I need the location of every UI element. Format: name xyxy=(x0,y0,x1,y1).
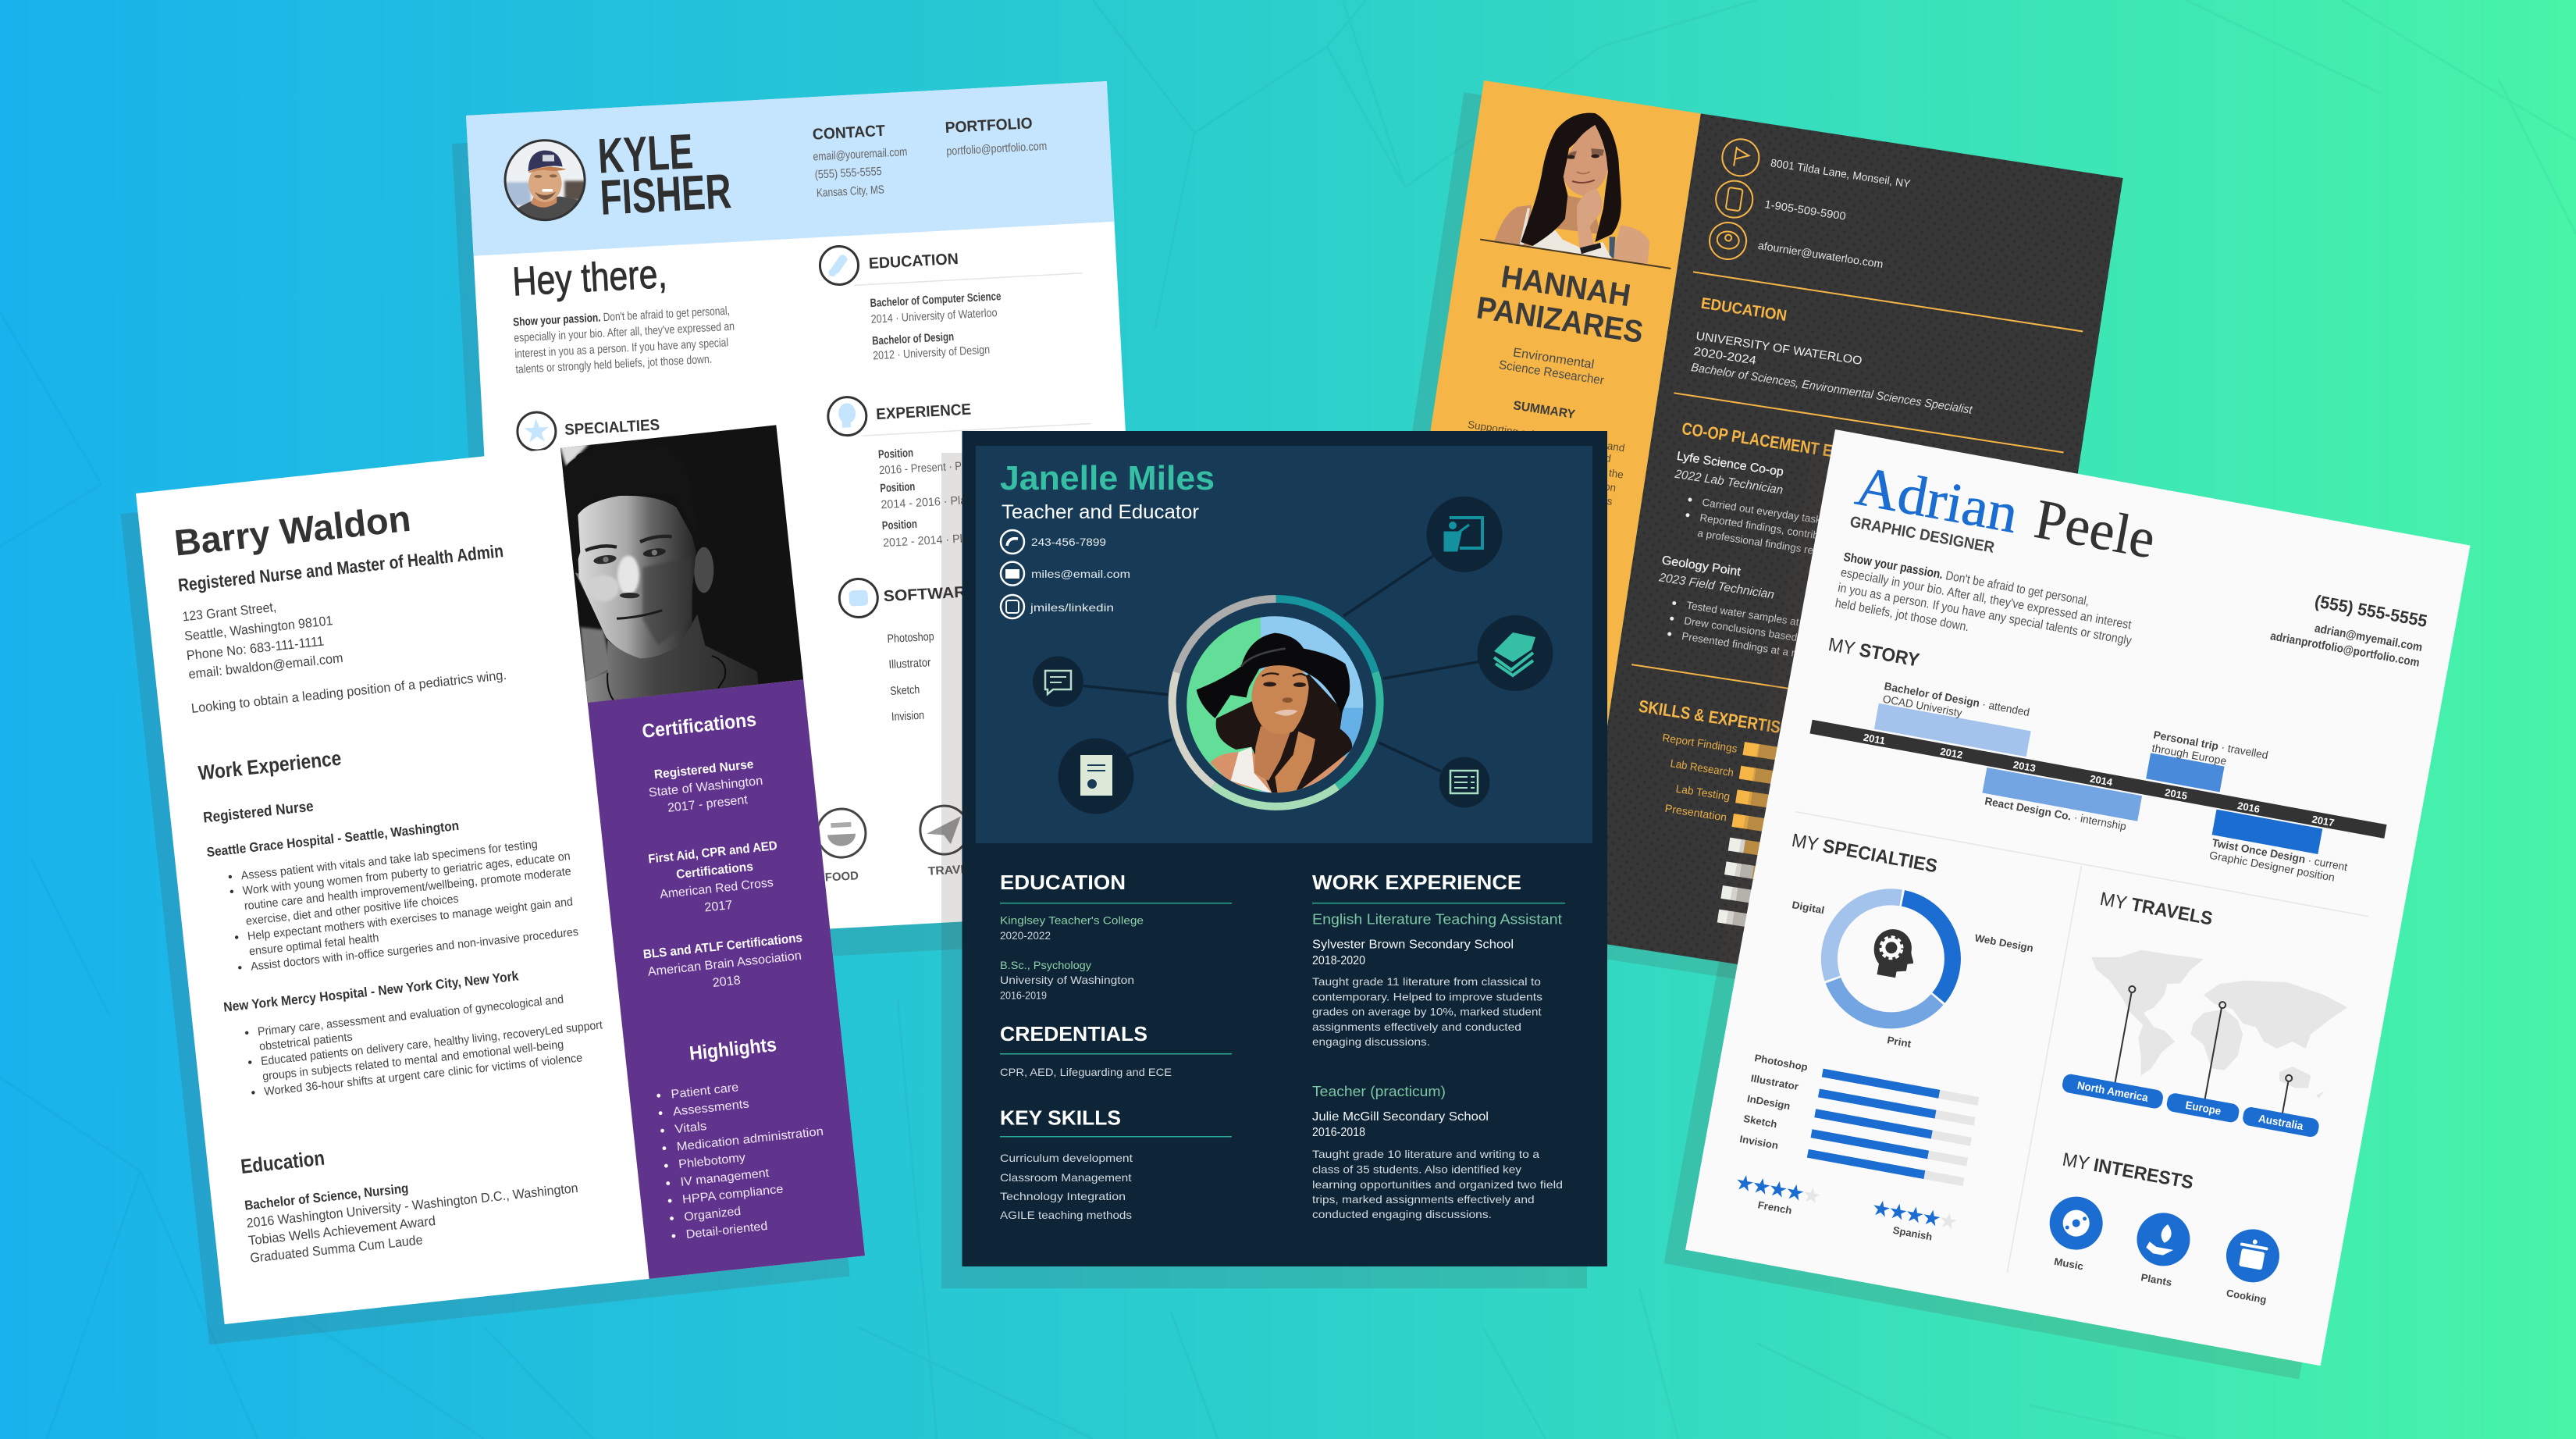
software list xyxy=(887,630,938,724)
photo: portrait of Barry xyxy=(560,425,804,703)
objective: Looking to obtain a leading position of a pediatrics wing. xyxy=(190,668,507,716)
education section: UNIVERSITY OF WATERLOO xyxy=(1695,329,1863,368)
software skill bars: Illustrator xyxy=(1750,1072,1799,1092)
job title: Science Researcher xyxy=(1498,358,1606,388)
icon: phone xyxy=(1713,178,1755,220)
name: HANNAH xyxy=(1499,260,1633,313)
job: Seattle Grace xyxy=(206,807,579,977)
education section xyxy=(1690,295,1984,417)
language rating: French xyxy=(1732,1174,1821,1221)
section: work experience: 2016-2018 xyxy=(1312,1126,1365,1139)
certification list: 2017 - present xyxy=(667,793,749,815)
section: credentials: CPR, AED, Lifeguarding and ECE xyxy=(1000,1066,1172,1078)
icon: software database xyxy=(838,578,879,618)
panel: Kyle Fisher resume xyxy=(450,81,1153,974)
contact: linkedin: jmiles/linkedin xyxy=(1030,601,1114,614)
highlights list: IV management xyxy=(680,1167,770,1189)
card sheet xyxy=(1685,429,2471,1366)
donut labels: Digital xyxy=(1791,899,1825,916)
timeline chart: Bachelor of Design · attended xyxy=(1884,679,2030,718)
avatar photo: Kyle xyxy=(504,139,586,222)
timeline chart: OCAD Univeristy xyxy=(1882,693,1963,719)
contact details: adrianprotfolio@portfolio.com xyxy=(2269,629,2421,670)
bio text xyxy=(1834,550,2138,664)
experience entries: Position xyxy=(881,518,917,533)
icon: cooking pot: Cooking xyxy=(2226,1287,2268,1305)
timeline chart: 2016 xyxy=(2236,800,2261,815)
icon: cooking pot xyxy=(2218,1225,2284,1306)
bio text: interest in you as a person. If you have any special xyxy=(514,336,729,361)
name: KYLE xyxy=(596,124,695,184)
software skill bars: Photoshop xyxy=(1753,1052,1809,1073)
heading: my specialties: MY SPECIALTIES xyxy=(1790,830,1939,877)
highlights list: Patient care xyxy=(671,1081,739,1101)
education entries: 2012 · University of Design xyxy=(873,344,990,363)
skills section xyxy=(1608,696,1811,931)
highlights list: Assessments xyxy=(672,1097,750,1119)
section: work experience: assignments effectively and conducted xyxy=(1312,1020,1521,1033)
location pills: Australia xyxy=(2258,1112,2304,1132)
software list: Sketch xyxy=(890,683,920,698)
card shadow xyxy=(452,109,1137,974)
co-op placement section: 2022 Lab Technician xyxy=(1673,468,1784,497)
portfolio block xyxy=(945,114,1048,159)
contact details: adrian@myemail.com xyxy=(2314,622,2424,654)
photo: Janelle xyxy=(1184,614,1368,796)
co-op placement section: Tested water samples at sites xyxy=(1685,599,1824,632)
contact details: 123 Grant Street, xyxy=(182,600,277,625)
education details: 2016 Washington University - Washington D.C., Washington xyxy=(246,1181,578,1231)
section: work experience: WORK EXPERIENCE xyxy=(1312,871,1521,894)
highlights list: Medication administration xyxy=(676,1125,824,1154)
job: Seattle Grace: ensure optimal fetal health xyxy=(248,931,379,958)
timeline chart: Personal trip · travelled xyxy=(2152,728,2269,761)
card sheet xyxy=(136,425,865,1324)
timeline chart: 2014 xyxy=(2089,773,2114,789)
highlights list: Detail-oriented xyxy=(685,1220,768,1241)
contact details: Phone No: 683-111-1111 xyxy=(186,634,325,663)
portfolio block: portfolio@portfolio.com xyxy=(946,140,1048,159)
education details: Graduated Summa Cum Laude xyxy=(250,1232,423,1266)
co-op placement section: Carried out everyday tasks in the lab xyxy=(1702,496,1872,533)
experience entries: Position xyxy=(878,447,913,461)
progress ring xyxy=(1172,599,1380,807)
heading: specialties: SPECIALTIES xyxy=(564,416,660,439)
contact: phone xyxy=(1001,530,1106,554)
education entries: Bachelor of Computer Science xyxy=(870,290,1002,310)
section: key skills: Classroom Management xyxy=(1000,1171,1132,1184)
experience entries xyxy=(878,443,984,550)
section: work experience: Taught grade 10 literature and writing to a xyxy=(1312,1148,1539,1160)
icon: location flag xyxy=(1720,137,1762,179)
summary text: Supporting scientific research and xyxy=(1467,419,1625,454)
job: New York Mercy: New York Mercy Hospital - New York City, New York xyxy=(222,968,520,1015)
bio text: Show your passion. Don't be afraid to get personal, xyxy=(1842,550,2090,608)
timeline chart: React Design Co. · internship xyxy=(1984,795,2127,832)
software list: Invision xyxy=(891,709,924,724)
education details xyxy=(244,1163,582,1266)
contact details xyxy=(2269,585,2428,670)
skills section: SKILLS & EXPERTISE xyxy=(1638,696,1791,739)
icon: travel plane xyxy=(919,804,970,856)
co-op placement section xyxy=(1649,419,1915,672)
heading: software: SOFTWARE xyxy=(883,583,977,605)
card shadow xyxy=(1664,443,2449,1380)
heading: highlights: Highlights xyxy=(688,1034,777,1065)
section: work experience: trips, marked assignments effectively and xyxy=(1312,1193,1535,1206)
donut chart xyxy=(1819,887,1962,1031)
icon: checklist xyxy=(1439,757,1489,807)
section: key skills: Curriculum development xyxy=(1000,1152,1133,1164)
certification list: First Aid, CPR and AED xyxy=(648,839,778,867)
job title xyxy=(1498,344,1607,388)
name: Peele xyxy=(2030,487,2160,570)
job: New York Mercy: Educated patients on delivery care, healthy living, recoveryLed support xyxy=(260,1018,603,1068)
icon: music disc: Music xyxy=(2053,1256,2084,1272)
education entries: 2014 · University of Waterloo xyxy=(870,306,998,326)
job: New York Mercy xyxy=(222,960,607,1102)
heading: my interests: MY INTERESTS xyxy=(2061,1149,2195,1194)
label: food: FOOD xyxy=(824,869,859,885)
certification list: BLS and ATLF Certifications xyxy=(642,931,803,962)
contact details: (555) 555-5555 xyxy=(2313,591,2428,631)
section: credentials: CREDENTIALS xyxy=(1000,1022,1147,1045)
icon: head with gear xyxy=(1870,926,1919,981)
name: FISHER xyxy=(599,164,733,226)
job title: Teacher and Educator xyxy=(1002,501,1199,523)
skill bars xyxy=(1717,742,1806,931)
timeline chart xyxy=(1800,668,2396,891)
section: key skills xyxy=(1000,1106,1232,1221)
section: work experience xyxy=(1312,871,1565,1220)
section: work experience: Julie McGill Secondary School xyxy=(1312,1110,1489,1124)
phone: 1-905-509-5900 xyxy=(1764,198,1847,223)
timeline chart: 2013 xyxy=(2012,759,2037,775)
language rating: Spanish: Spanish xyxy=(1892,1224,1934,1243)
certification list xyxy=(624,755,807,997)
bio text xyxy=(513,304,737,376)
summary text: skills and field-based projects xyxy=(1475,475,1614,508)
icon: experience head xyxy=(827,396,867,436)
section: key skills: AGILE teaching methods xyxy=(1000,1209,1132,1221)
icon: email bubble xyxy=(1707,220,1749,262)
section: credentials xyxy=(1000,1022,1232,1078)
contact: email xyxy=(1001,562,1130,586)
timeline chart: 2011 xyxy=(1863,732,1886,746)
greeting: Hey there, xyxy=(511,251,668,305)
certification list: American Red Cross xyxy=(660,876,774,902)
job: Seattle Grace: Work with young women from puberty to geriatric ages, educate on xyxy=(242,850,571,898)
highlights list: Vitals xyxy=(674,1120,707,1136)
panel: Hannah Panizares resume xyxy=(1412,80,2123,979)
language rating: Spanish xyxy=(1869,1199,1958,1247)
section: work experience: learning opportunities and organized two field xyxy=(1312,1178,1563,1191)
job: Seattle Grace: Assist doctors with in-office surgeries and non-invasive procedures xyxy=(250,925,579,974)
certification list: Certifications xyxy=(675,860,754,882)
icon: education diploma xyxy=(819,245,859,286)
timeline chart: through Europe xyxy=(2151,741,2228,768)
contact block: (555) 555-5555 xyxy=(814,165,882,182)
card sheet xyxy=(466,81,1151,946)
section: education xyxy=(1000,871,1232,1001)
bio text: talents or strongly held beliefs, jot those down. xyxy=(515,353,713,376)
certification list: 2017 xyxy=(704,899,733,915)
heading: my story: MY STORY xyxy=(1827,634,1921,671)
co-op placement section: Geology Point xyxy=(1661,554,1742,579)
heading: work experience: Work Experience xyxy=(197,746,343,785)
summary heading: SUMMARY xyxy=(1512,399,1576,422)
contact details: email: bwaldon@email.com xyxy=(187,650,343,682)
dark main column xyxy=(1574,113,2123,1004)
icon: food bowl xyxy=(816,807,867,859)
summary text xyxy=(1459,419,1628,508)
contact block: email@youremail.com xyxy=(813,145,908,164)
section: key skills: KEY SKILLS xyxy=(1000,1106,1121,1129)
language rating: French: French xyxy=(1757,1199,1793,1216)
heading: experience: EXPERIENCE xyxy=(876,401,972,423)
section: work experience: grades on average by 10%, marked student xyxy=(1312,1006,1542,1018)
education section: 2020-2024 xyxy=(1692,345,1757,368)
experience entries: Position xyxy=(880,480,916,495)
timeline chart: Graphic Designer position xyxy=(2208,849,2336,884)
label: travel: TRAVEL xyxy=(927,862,977,878)
bio text: held beliefs, jot those down. xyxy=(1834,597,1970,634)
section: education: 2016-2019 xyxy=(1000,988,1047,1001)
donut labels: Web Design xyxy=(1974,931,2034,954)
icon: certificate xyxy=(1059,739,1133,814)
job: New York Mercy: obstetrical patients xyxy=(258,1030,353,1053)
section: education: Kinglsey Teacher's College xyxy=(1000,914,1144,927)
highlights list: HPPA compliance xyxy=(681,1182,784,1206)
certification list: 2018 xyxy=(712,974,742,990)
experience entries: 2012 - 2014 · Place xyxy=(883,531,980,550)
co-op placement section: Reported findings, contributed to xyxy=(1699,511,1852,547)
education section: EDUCATION xyxy=(1699,295,1788,325)
co-op placement section: CO-OP PLACEMENT EXPERIENCE xyxy=(1681,419,1915,473)
job: New York Mercy: Worked 36-hour shifts at urgent care clinic for victims of violence xyxy=(263,1051,583,1099)
role: Registered Nurse xyxy=(202,799,315,827)
section: work experience: engaging discussions. xyxy=(1312,1035,1430,1048)
section: education: B.Sc., Psychology xyxy=(1000,959,1091,971)
summary text: conservation science across the xyxy=(1475,447,1624,481)
location pills: North America xyxy=(2076,1079,2149,1104)
skills section: Lab Research xyxy=(1670,757,1735,778)
skills section: Report Findings xyxy=(1661,731,1738,755)
contact block: Kansas City, MS xyxy=(817,183,884,200)
name xyxy=(1851,454,2160,570)
software list: Photoshop xyxy=(887,630,934,646)
software list: Illustrator xyxy=(888,656,931,671)
panel: Barry Waldon resume xyxy=(116,394,910,1345)
panel: Janelle Miles resume xyxy=(941,431,1607,1288)
timeline chart: 2017 xyxy=(2311,813,2336,828)
timeline chart: 2015 xyxy=(2164,786,2188,802)
world map xyxy=(2091,950,2347,1099)
card shadow xyxy=(121,446,850,1345)
icon: plants xyxy=(2129,1209,2194,1291)
icon: music disc xyxy=(2041,1192,2107,1274)
donut labels: Print xyxy=(1886,1034,1912,1050)
header panel xyxy=(976,446,1592,843)
section: education: EDUCATION xyxy=(1000,871,1126,894)
map pins xyxy=(2112,985,2304,1114)
contact: phone: 243-456-7899 xyxy=(1031,536,1106,548)
section: work experience: conducted engaging discussions. xyxy=(1312,1208,1492,1220)
section: work experience: Teacher (practicum) xyxy=(1312,1084,1446,1099)
job: Seattle Grace: Seattle Grace Hospital - Seattle, Washington xyxy=(206,818,460,860)
purple sidebar xyxy=(588,679,865,1279)
co-op placement section: 2023 Field Technician xyxy=(1657,571,1775,602)
name xyxy=(596,123,733,226)
donut labels xyxy=(1770,899,2034,1068)
icon: plants: Plants xyxy=(2140,1271,2173,1288)
card shadow xyxy=(941,453,1587,1288)
email: afournier@uwaterloo.com xyxy=(1757,239,1884,270)
section: work experience: contemporary. Helped to improve students xyxy=(1312,990,1542,1003)
experience entries: 2014 - 2016 · Place xyxy=(881,493,979,511)
bio text: Show your passion. Don't be afraid to get personal, xyxy=(513,305,730,329)
contact details xyxy=(182,593,343,682)
co-op placement section: Lyfe Science Co-op xyxy=(1676,450,1784,479)
job: Seattle Grace: routine care and health improvement/wellbeing, promote moderate xyxy=(244,865,571,913)
software skill bars xyxy=(1738,1052,1980,1186)
orange sidebar xyxy=(1358,80,1701,939)
bio text: especially in your bio. After all, they've expressed an interest xyxy=(1840,566,2133,632)
job: New York Mercy: groups in subjects related to mental and emotional well-being xyxy=(262,1038,564,1083)
card sheet xyxy=(962,431,1607,1266)
card shadow xyxy=(1338,92,2103,1016)
highlights list: Organized xyxy=(684,1205,742,1224)
education section: Bachelor of Sciences, Environmental Sciences Specialist xyxy=(1690,361,1973,417)
skills section: Presentation xyxy=(1664,802,1727,824)
heading: my travels: MY TRAVELS xyxy=(2098,889,2215,930)
summary text: fieldwork in environmental and xyxy=(1469,432,1612,465)
job: Seattle Grace: Assess patient with vitals and take lab specimens for testing xyxy=(240,838,539,882)
job: Seattle Grace: exercise, diet and other positive life choices xyxy=(245,892,459,928)
education entries xyxy=(870,290,1004,363)
job title: Registered Nurse and Master of Health Admin xyxy=(177,540,504,596)
job title: GRAPHIC DESIGNER xyxy=(1848,514,1996,557)
co-op placement section: Presented findings at a meeting xyxy=(1681,630,1829,664)
name: Adrian xyxy=(1851,454,2023,545)
icon: specialties star xyxy=(517,411,557,451)
photo: Hannah xyxy=(1494,112,1650,264)
highlights list: Phlebotomy xyxy=(678,1151,746,1171)
education entries: Bachelor of Design xyxy=(872,330,955,348)
co-op placement section: a professional findings report xyxy=(1697,527,1832,559)
education details: Bachelor of Science, Nursing xyxy=(244,1181,409,1213)
name: Barry Waldon xyxy=(173,497,413,564)
heading: certifications: Certifications xyxy=(641,709,757,743)
section: work experience: Sylvester Brown Secondary School xyxy=(1312,939,1514,952)
software skill bars: Sketch xyxy=(1742,1113,1778,1130)
section: education: 2020-2022 xyxy=(1000,929,1051,942)
section: key skills: Technology Integration xyxy=(1000,1190,1126,1202)
experience entries: 2016 - Present · Place xyxy=(879,458,980,477)
section: work experience: class of 35 students. Also identified key xyxy=(1312,1163,1521,1176)
icon: message bubble xyxy=(1033,656,1083,707)
skills section: Lab Testing xyxy=(1675,782,1731,803)
heading: education: EDUCATION xyxy=(868,251,959,272)
job: Seattle Grace: Help expectant mothers with exercises to manage weight gain and xyxy=(247,896,574,943)
icon: books xyxy=(1477,615,1553,691)
address: 8001 Tilda Lane, Monseil, NY xyxy=(1770,156,1912,190)
timeline chart: Twist Once Design · current xyxy=(2211,836,2349,873)
bio text: in you as a person. If you have any special talents or strongly xyxy=(1837,582,2133,648)
name: Janelle Miles xyxy=(1000,459,1215,497)
summary text: ecosystem with strong report on xyxy=(1468,460,1617,493)
section: work experience: Taught grade 11 literature from classical to xyxy=(1312,975,1541,988)
certification list: American Brain Association xyxy=(647,949,802,979)
panel: Adrian Peele resume xyxy=(1664,426,2471,1383)
section: education: University of Washington xyxy=(1000,974,1134,986)
header band xyxy=(466,81,1114,256)
timeline chart: 2012 xyxy=(1939,746,1964,760)
contact block xyxy=(811,121,909,200)
portfolio block: PORTFOLIO xyxy=(945,115,1033,137)
bio text: especially in your bio. After all, they've expressed an xyxy=(514,320,735,345)
location pills: Europe xyxy=(2185,1099,2222,1117)
connector lines xyxy=(1083,556,1479,771)
certification list: State of Washington xyxy=(648,775,763,800)
software skill bars: InDesign xyxy=(1746,1092,1791,1112)
highlights list xyxy=(656,1072,834,1243)
contact: email: miles@email.com xyxy=(1031,568,1130,580)
contact block: CONTACT xyxy=(812,123,885,144)
section: work experience: English Literature Teaching Assistant xyxy=(1312,912,1562,928)
location pills xyxy=(2061,1073,2320,1138)
name xyxy=(1475,257,1650,350)
contact: linkedin xyxy=(1001,595,1114,618)
job: New York Mercy: Primary care, assessment and evaluation of gynecological and xyxy=(257,992,564,1038)
contact details: Seattle, Washington 98101 xyxy=(183,613,333,643)
software skill bars: Invision xyxy=(1738,1133,1779,1152)
icon: teacher board xyxy=(1427,497,1502,572)
education details: Tobias Wells Achievement Award xyxy=(247,1213,436,1248)
co-op placement section: Drew conclusions based on data xyxy=(1683,614,1836,650)
certification list: Registered Nurse xyxy=(653,758,754,782)
name: PANIZARES xyxy=(1475,290,1646,350)
heading: education: Education xyxy=(240,1146,326,1178)
section: work experience: 2018-2020 xyxy=(1312,954,1365,967)
job title: Environmental xyxy=(1512,346,1595,372)
